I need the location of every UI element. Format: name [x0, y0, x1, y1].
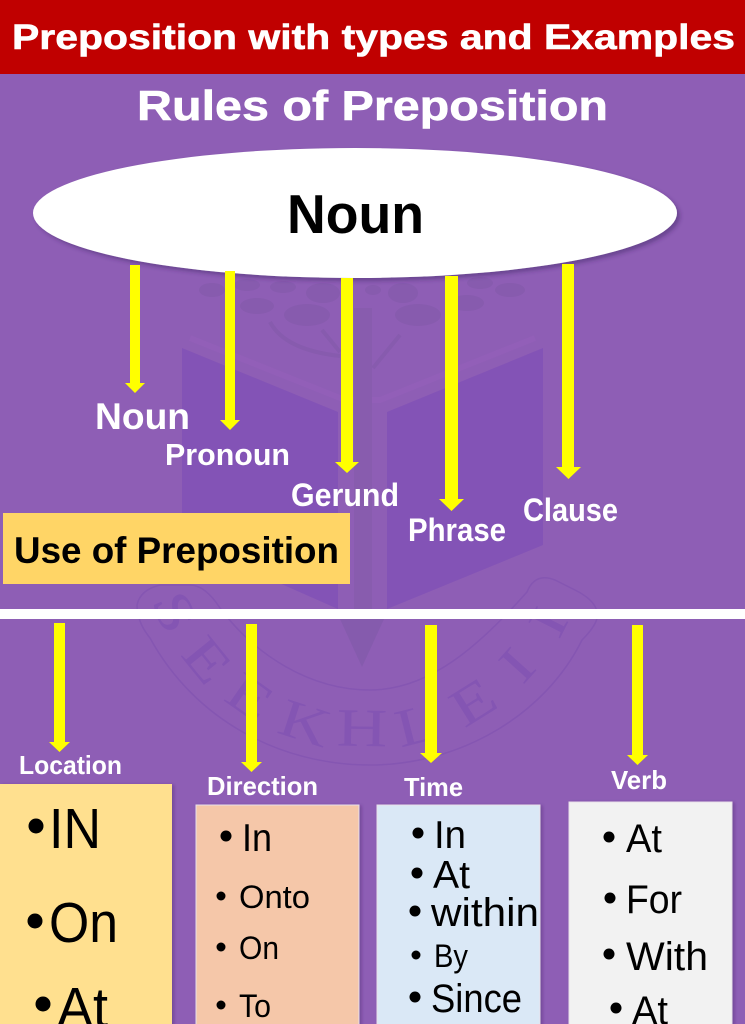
label: verb: Verb: [611, 765, 667, 795]
label: noun: Noun: [95, 396, 190, 437]
arrow: to noun: [125, 265, 145, 393]
label: location: Location: [19, 750, 122, 780]
label: time: Time: [404, 772, 463, 802]
arrow: to direction: [241, 624, 262, 772]
white divider band: [0, 609, 745, 619]
label: direction: Direction: [207, 771, 318, 801]
watermark: book, tree and seal: H: [336, 697, 388, 759]
arrow: to pronoun: [220, 271, 240, 430]
panel: time: In: [434, 814, 466, 857]
title: Preposition with types and Examples: [12, 17, 735, 57]
panel: direction: In: [242, 817, 272, 860]
label: gerund: Gerund: [291, 477, 399, 513]
panel: direction: Onto: [239, 879, 310, 915]
watermark: book, tree and seal: [137, 277, 597, 765]
oval: noun: Noun: [287, 183, 424, 245]
panel: direction: On: [239, 930, 279, 966]
panel: verb: With: [626, 935, 708, 979]
arrow: to location: [49, 623, 70, 752]
watermark: book, tree and seal: E: [215, 660, 285, 734]
arrow: to clause: [556, 264, 581, 479]
watermark: book, tree and seal: L: [389, 690, 445, 759]
panel: direction: To: [239, 988, 271, 1024]
watermark: book, tree and seal: S: [140, 582, 211, 642]
arrow: to time: [420, 625, 442, 763]
panel: verb: At: [626, 817, 662, 861]
panel: time: Since: [431, 977, 522, 1021]
arrow: to verb: [627, 625, 648, 765]
panel: time: At: [433, 854, 470, 897]
watermark: book, tree and seal: K: [272, 686, 338, 759]
panel: location: IN: [49, 797, 101, 861]
label: pronoun: Pronoun: [165, 437, 290, 472]
label: phrase: Phrase: [408, 512, 506, 548]
panel: time: By: [434, 938, 468, 974]
watermark: book, tree and seal: E: [439, 665, 507, 739]
subtitle: rules of preposition: Rules of Preposition: [137, 82, 608, 129]
panel: location: On: [49, 891, 118, 955]
label: clause: Clause: [523, 492, 618, 528]
watermark: book, tree and seal: I: [516, 598, 580, 646]
heading box: use of preposition: [3, 513, 350, 584]
oval: noun: [33, 148, 677, 278]
panel: time: within: [430, 891, 539, 935]
panel: verb: For: [626, 878, 682, 922]
panel: location: [0, 784, 172, 1024]
heading box: use of preposition: Use of Preposition: [14, 530, 339, 571]
watermark: book, tree and seal: E: [170, 624, 244, 696]
watermark: book, tree and seal: I: [487, 636, 547, 694]
arrow: to phrase: [439, 276, 464, 511]
panel: direction: [196, 805, 359, 1024]
panel: verb: [569, 802, 732, 1024]
arrow: to gerund: [335, 278, 359, 473]
header banner: [0, 0, 745, 74]
panel: time: [377, 805, 540, 1024]
